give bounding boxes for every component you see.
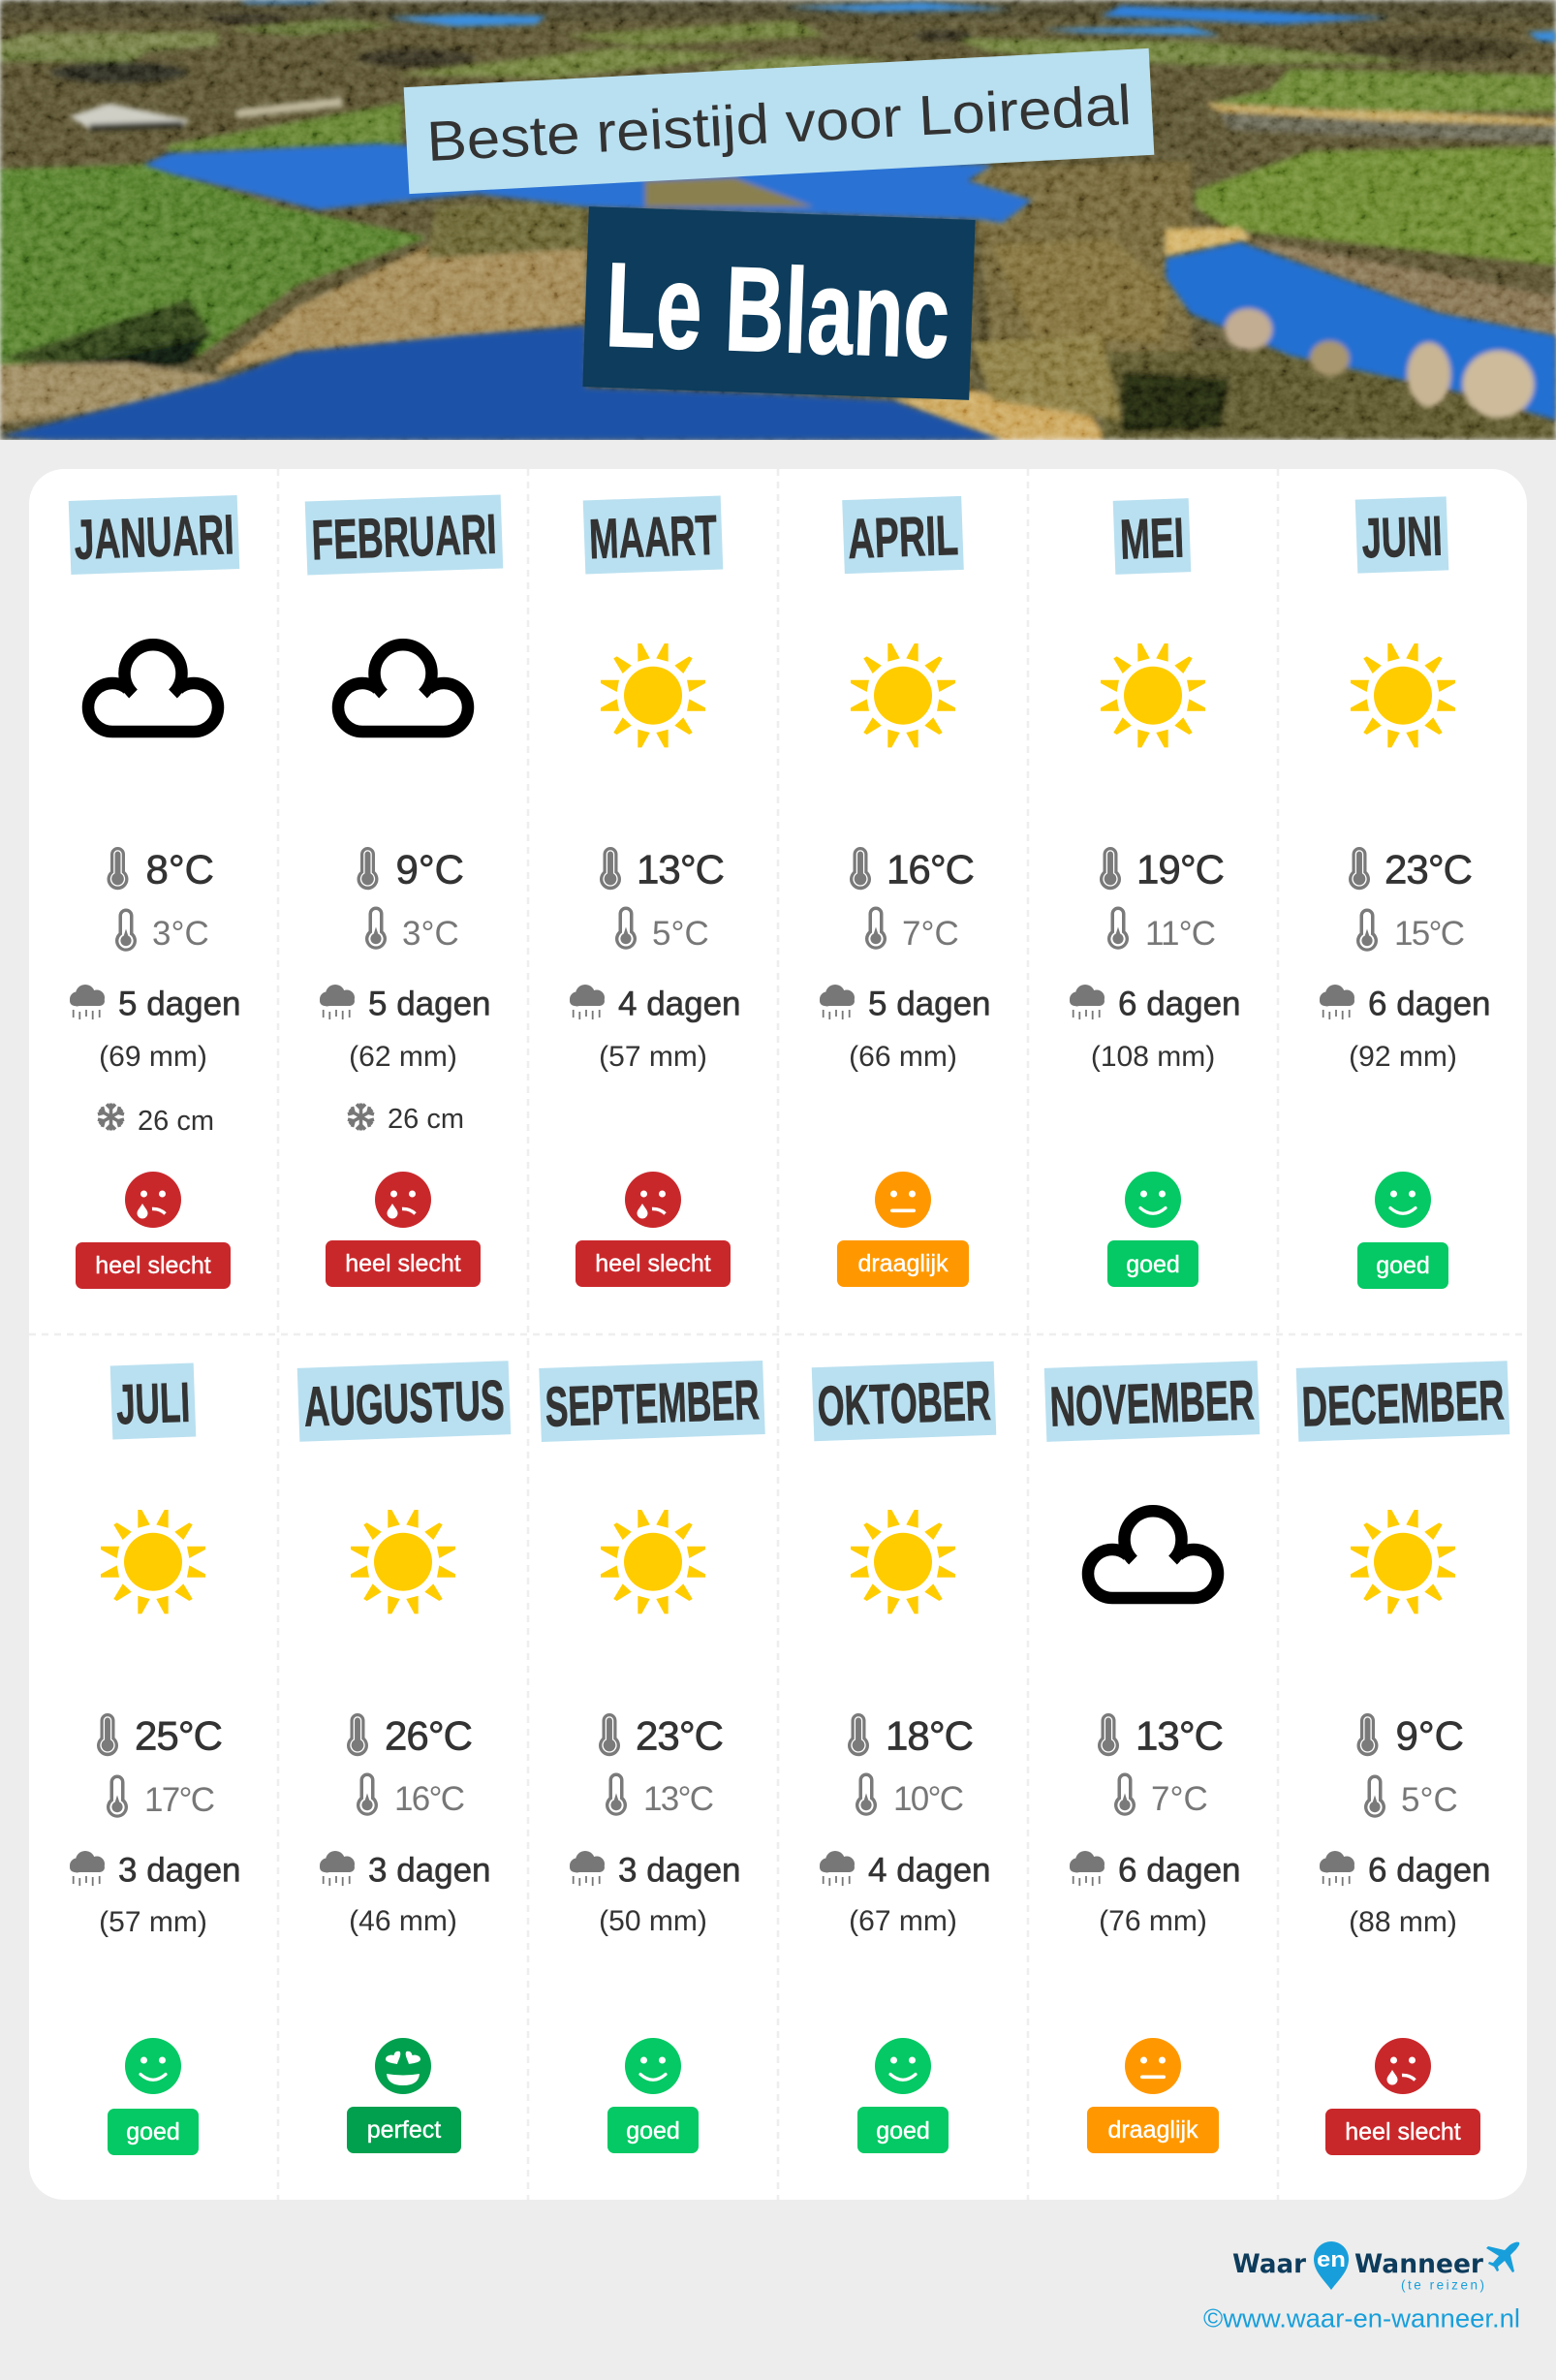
rain days: 5 dagen [118,986,241,1023]
icon: thermometer low [615,907,637,950]
min temperature: 15°C [1394,915,1465,953]
title banner: Beste reistijd voor Loiredal: Beste reistijd voor Loiredal [425,74,1133,173]
rain days: 6 dagen [1118,986,1241,1023]
icon: rain [570,985,605,1019]
max temperature: 26°C [385,1713,473,1759]
rating badge [1357,1242,1448,1289]
rainfall: (92 mm) [1349,1041,1457,1073]
icon: thermometer high [347,1713,368,1756]
rating badge: heel slecht [95,1252,211,1279]
month label: AUGUSTUS [303,1368,506,1439]
icon: rating face [1125,1172,1181,1228]
icon: rating face [875,1172,931,1228]
rainfall: (57 mm) [599,1041,707,1073]
rating badge: goed [1376,1252,1430,1279]
rating badge [108,2109,199,2155]
rating badge [857,2107,949,2153]
min temperature: 5°C [1401,1781,1458,1819]
month label [539,1361,765,1442]
month label: JUNI [1360,505,1444,570]
icon: rain [1070,1851,1105,1886]
month label [1113,498,1191,575]
snowfall: 26 cm [388,1104,464,1135]
rating badge [1107,1240,1198,1287]
icon: cloud [338,644,468,732]
rain days: 4 dagen [868,1852,991,1890]
icon: thermometer low [1356,909,1378,952]
month label: OKTOBER [817,1369,992,1438]
panel: maart [570,496,741,1287]
min temperature: 16°C [394,1780,465,1818]
max temperature: 8°C [145,847,214,892]
month label [842,496,964,574]
icon: rating face [1375,1172,1431,1228]
icon: rain [1320,1851,1354,1886]
title banner: Beste reistijd voor Loiredal [404,48,1154,194]
max temperature: 18°C [886,1713,974,1759]
copyright url: ©www.waar-en-wanneer.nl [1203,2304,1520,2333]
icon: thermometer low [115,909,137,952]
rating badge: heel slecht [595,1250,711,1277]
rating badge [607,2107,699,2153]
min temperature: 17°C [144,1781,215,1819]
rating badge [1325,2109,1480,2155]
rainfall: (46 mm) [349,1905,457,1937]
panel: november [1044,1361,1260,2153]
icon: thermometer high [1356,1713,1378,1756]
icon: rating face [125,1172,181,1228]
panel: juli [70,1363,241,2155]
max temperature: 13°C [1136,1713,1224,1759]
icon: thermometer high [599,1713,620,1756]
rain days: 3 dagen [118,1852,241,1890]
icon: rain [320,985,355,1019]
icon: thermometer low [1114,1773,1136,1816]
rainfall: (69 mm) [99,1041,207,1073]
panel: augustus [297,1361,511,2153]
rating badge [76,1242,231,1289]
icon: thermometer high [97,1713,118,1756]
max temperature: 9°C [395,847,464,892]
icon: rain [820,1851,855,1886]
min temperature: 7°C [902,915,959,953]
month label: MAART [588,504,718,571]
rain days: 6 dagen [1368,986,1491,1023]
panel: oktober [812,1362,996,2153]
title: Le Blanc: Le Blanc [604,238,952,384]
rating badge: draaglijk [857,1250,949,1277]
icon: thermometer high [357,847,378,890]
rain days: 3 dagen [618,1852,741,1890]
icon: sun [1101,643,1205,747]
header photo: aerial view of lakes [0,0,1556,440]
rating badge [347,2107,461,2153]
icon: rating face [625,1172,681,1228]
title: Le Blanc [582,206,976,400]
rating badge [837,1240,969,1287]
icon: sun [851,1510,955,1613]
icon: thermometer low [357,1773,378,1816]
rating badge: goed [1126,1251,1180,1278]
max temperature: 16°C [887,847,975,892]
logo word: Waar: Waar [1232,2249,1307,2279]
rating badge: draaglijk [1107,2116,1198,2144]
icon: rating face [875,2038,931,2094]
rainfall: (62 mm) [349,1041,457,1073]
min temperature: 3°C [152,915,209,953]
icon: rain [320,1851,355,1886]
icon: rating face [1375,2038,1431,2094]
rating badge [326,1240,481,1287]
rating badge [576,1240,731,1287]
icon: thermometer high [107,847,128,890]
rainfall: (88 mm) [1349,1906,1457,1938]
icon: sun [1351,643,1455,747]
rating badge: goed [876,2117,930,2145]
month label: FEBRUARI [311,503,498,572]
rain days: 6 dagen [1368,1852,1491,1890]
rain days: 4 dagen [618,986,741,1023]
panel: februari [305,494,503,1287]
logo: Waar en Wanneer [1232,2241,1519,2293]
logo word: en: en [1317,2247,1346,2271]
icon: sun [101,1510,205,1613]
max temperature: 13°C [637,847,725,892]
month label: JANUARI [74,503,235,572]
icon: thermometer high [1349,847,1370,890]
month label: NOVEMBER [1049,1368,1256,1439]
icon: rain [1070,985,1105,1019]
icon: cloud [88,644,218,732]
icon: thermometer high [600,847,621,890]
month label: JULI [115,1371,191,1436]
rainfall: (76 mm) [1099,1905,1207,1937]
month label [110,1363,196,1439]
logo tagline: (te reizen) [1401,2277,1484,2293]
min temperature: 7°C [1151,1780,1208,1818]
icon: rain [820,985,855,1019]
icon: snowflake [97,1103,125,1130]
rain days: 5 dagen [868,986,991,1023]
logo word: Wanneer: Wanneer [1354,2249,1484,2279]
photo texture [0,0,1556,440]
rating badge: goed [126,2118,180,2145]
rating badge [1087,2107,1219,2153]
icon: thermometer low [606,1773,627,1816]
icon: sun [601,1510,705,1613]
icon: thermometer low [107,1775,128,1818]
icon: location pin [1314,2241,1349,2290]
icon: thermometer low [856,1773,877,1816]
icon: rain [570,1851,605,1886]
rating badge: goed [626,2117,680,2145]
min temperature: 11°C [1145,915,1216,953]
icon: thermometer low [1364,1775,1385,1818]
max temperature: 9°C [1395,1713,1464,1759]
icon: thermometer low [1107,907,1129,950]
rating badge: perfect [367,2116,441,2144]
icon: rating face [375,1172,431,1228]
rating badge: heel slecht [1345,2118,1461,2145]
icon: thermometer high [850,847,871,890]
month label [583,496,723,574]
month label [305,494,503,576]
icon: rating face [1125,2038,1181,2094]
icon: sun [351,1510,455,1613]
min temperature: 13°C [643,1780,714,1818]
rainfall: (50 mm) [599,1905,707,1937]
icon: cloud [1088,1511,1218,1598]
icon: rain [70,985,105,1019]
month label [297,1361,511,1442]
max temperature: 25°C [135,1713,223,1759]
icon: sun [851,643,955,747]
min temperature: 10°C [893,1780,964,1818]
icon: rain [1320,985,1354,1019]
panel: months card [29,469,1527,2200]
icon: rating face [625,2038,681,2094]
rain days: 3 dagen [368,1852,491,1890]
icon: sun [601,643,705,747]
icon: thermometer high [1098,1713,1119,1756]
panel: januari [69,495,241,1289]
rain days: 5 dagen [368,986,491,1023]
icon: sun [1351,1510,1455,1613]
min temperature: 3°C [402,915,459,953]
snowfall: 26 cm [138,1106,214,1137]
rating badge: heel slecht [345,1250,461,1277]
month label: APRIL [847,504,959,571]
icon: thermometer low [865,907,887,950]
month label [1044,1361,1260,1442]
rainfall: (66 mm) [849,1041,957,1073]
month label [1355,496,1448,574]
icon: airplane [1486,2242,1519,2272]
panel: september [539,1361,765,2153]
icon: rating face [125,2038,181,2094]
max temperature: 19°C [1136,847,1225,892]
month label [812,1362,996,1441]
max temperature: 23°C [1385,847,1473,892]
month label [69,495,239,575]
rain days: 6 dagen [1118,1852,1241,1890]
icon: thermometer high [1100,847,1121,890]
panel: december [1296,1361,1509,2155]
rainfall: (57 mm) [99,1906,207,1938]
min temperature: 5°C [652,915,709,953]
icon: rating face [375,2038,431,2094]
icon: rain [70,1851,105,1886]
icon: snowflake [347,1103,375,1130]
rainfall: (108 mm) [1091,1041,1215,1073]
panel: juni [1320,496,1491,1289]
panel: april [820,496,991,1287]
rainfall: (67 mm) [849,1905,957,1937]
panel: mei [1070,498,1241,1287]
max temperature: 23°C [636,1713,724,1759]
icon: thermometer low [365,907,387,950]
month label: MEI [1119,506,1185,572]
month label: SEPTEMBER [545,1368,761,1439]
icon: thermometer high [848,1713,869,1756]
